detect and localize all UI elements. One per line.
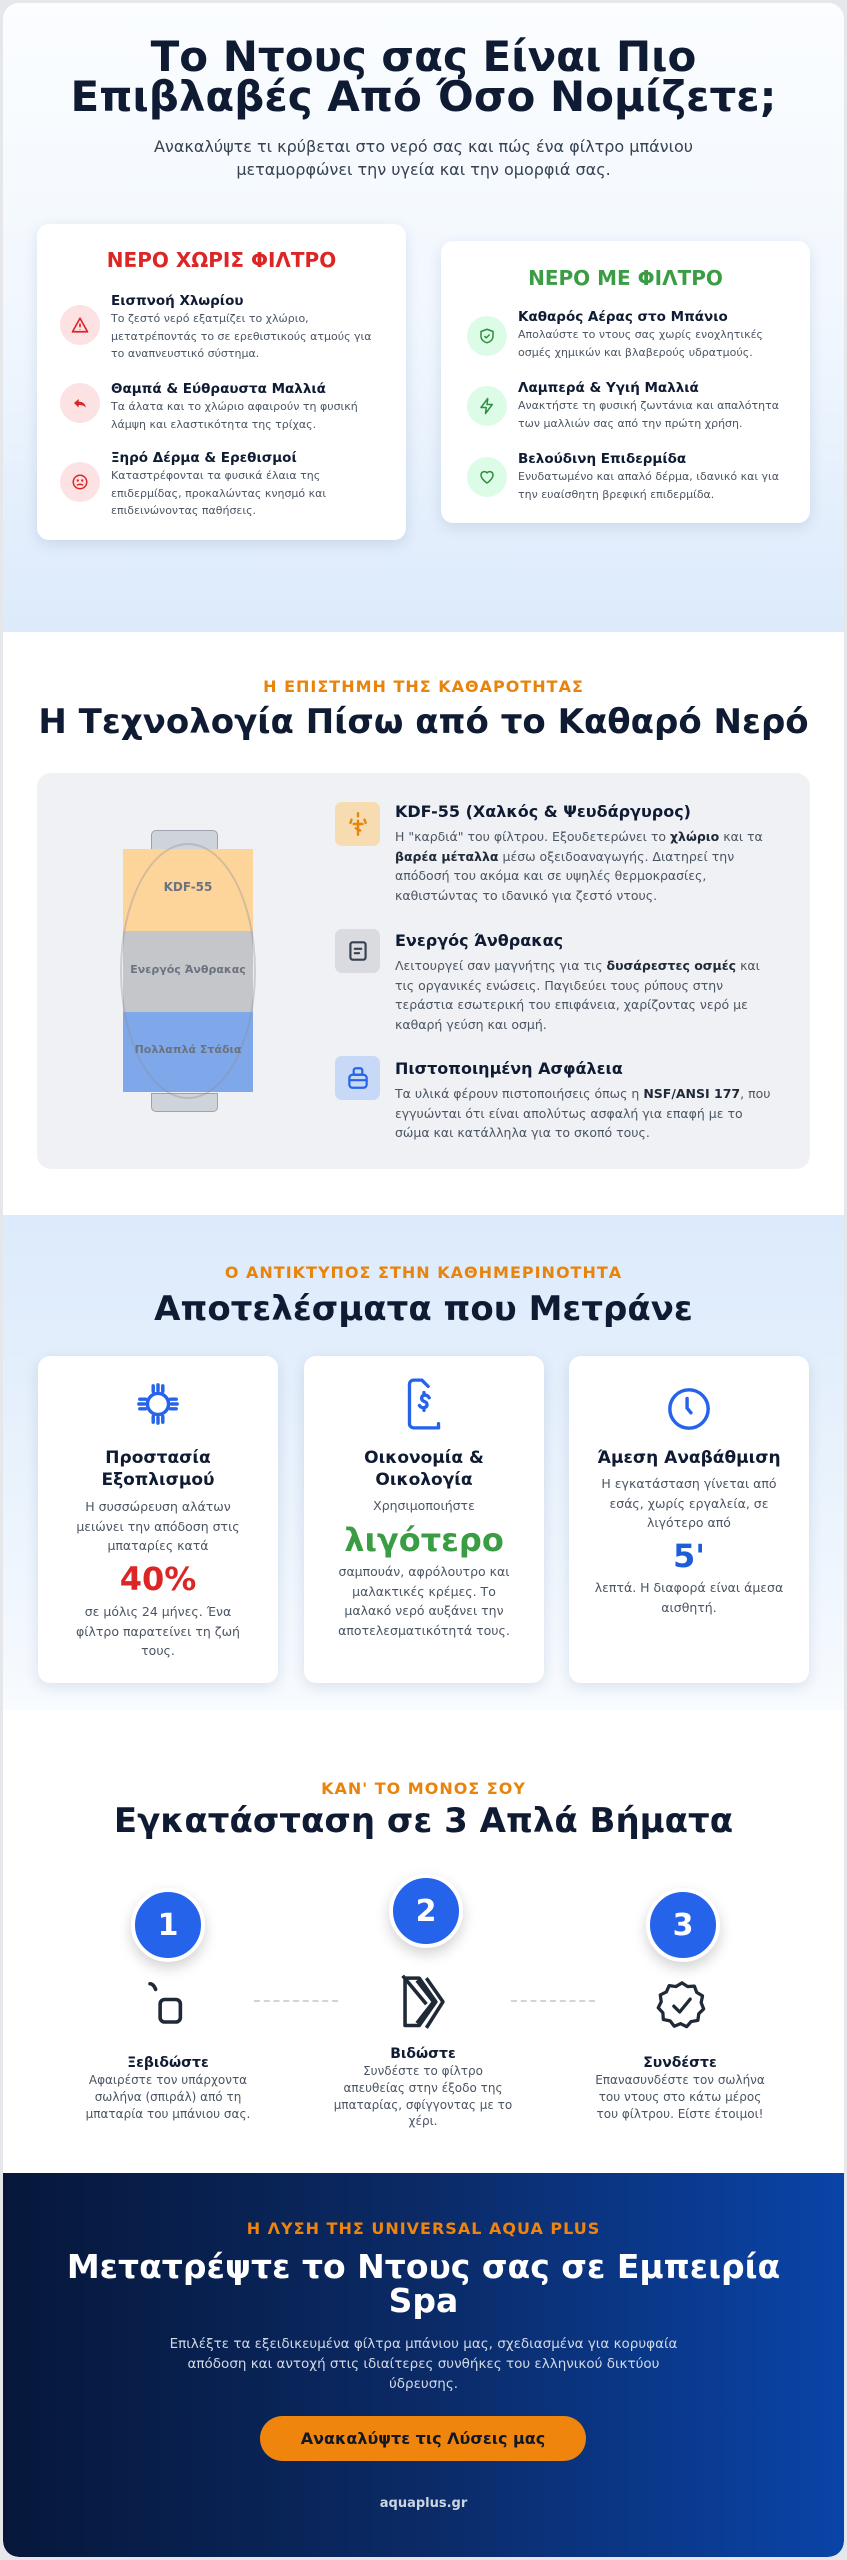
card: equipment protection: Προστασία	[105, 1448, 211, 1468]
item: chlorine: Εισπνοή Χλωρίου	[111, 293, 243, 309]
step 1: μπαταρία του μπάνιου σας.	[86, 2107, 250, 2121]
card: equipment protection: 40%	[120, 1560, 196, 1598]
card: instant upgrade: Άμεση Αναβάθμιση	[597, 1448, 781, 1468]
item: velvet skin: την ευαίσθητη βρεφική επιδερμίδα.	[518, 488, 714, 500]
item: KDF-55: καθιστώντας το ιδανικό για ζεστό ντους.	[395, 888, 657, 902]
card: instant upgrade: εσάς, χωρίς εργαλεία, σε	[610, 1496, 768, 1511]
item: skin: Ξηρό Δέρμα & Ερεθισμοί	[111, 450, 297, 466]
item: KDF-55: KDF-55 (Χαλκός & Ψευδάργυρος)	[395, 802, 691, 821]
item: chlorine: Το ζεστό νερό εξατμίζει το χλώριο,	[111, 312, 309, 325]
filter cartridge diagram: KDF-55	[164, 880, 212, 894]
badge 1: 1	[158, 1908, 178, 1942]
card: equipment protection: φίλτρο παρατείνει τη ζωή	[76, 1624, 240, 1639]
item: clean air	[518, 309, 763, 358]
item: certified safety: Πιστοποιημένη Ασφάλεια	[395, 1059, 623, 1078]
step 2: Βιδώστε	[390, 2046, 456, 2062]
icon: gear sun	[137, 1383, 179, 1425]
heading: with filter: ΝΕΡΟ ΜΕ ΦΙΛΤΡΟ	[528, 266, 723, 290]
section: results	[3, 1215, 844, 1710]
card: equipment protection: Εξοπλισμού	[101, 1470, 215, 1490]
section: technology	[3, 632, 844, 1215]
section: installation steps	[3, 1710, 844, 2173]
item: activated carbon: τις οργανικές ενώσεις. Παγιδεύει τους ρύπους στην	[395, 978, 723, 992]
item: activated carbon: τεράστια εσωτερική του επιφάνεια, χαρίζοντας νερό με	[395, 997, 748, 1012]
card: equipment protection: μπαταρίες κατά	[107, 1538, 209, 1553]
step 1	[86, 1892, 250, 2121]
badge 1	[131, 1888, 205, 1962]
icon: carbon	[335, 929, 380, 973]
filter cartridge diagram	[120, 830, 256, 1112]
icon: hair	[60, 383, 100, 423]
item: certified safety: εγγυώνται ότι είναι απολύτως ασφαλή για επαφή με το	[395, 1106, 743, 1120]
step 2: μπαταρίας, σφίγγοντας με το	[334, 2098, 512, 2112]
card: instant upgrade	[569, 1356, 809, 1683]
icon: bolt	[467, 386, 507, 426]
step 3: του ντους στο κάτω μέρος	[599, 2090, 761, 2104]
heading: without filter: ΝΕΡΟ ΧΩΡΙΣ ΦΙΛΤΡΟ	[107, 248, 336, 272]
icon: shield	[467, 316, 507, 356]
subtitle: Ανακαλύψτε τι κρύβεται στο νερό σας και πώς ένα φίλτρο μπάνιου	[154, 137, 693, 156]
heading: Η Τεχνολογία Πίσω από το Καθαρό Νερό	[38, 702, 809, 742]
icon: safety	[335, 1056, 380, 1100]
text: ύδρευσης.	[389, 2376, 458, 2392]
text	[170, 2336, 677, 2392]
heading: Μετατρέψτε το Ντους σας σε Εμπειρία	[67, 2247, 780, 2286]
text: απόδοση και αντοχή στις ιδιαίτερες συνθήκες του ελληνικού δικτύου	[188, 2356, 659, 2372]
icon: heart	[467, 457, 507, 497]
card: instant upgrade: Η εγκατάσταση γίνεται από	[601, 1476, 777, 1491]
card: economy: μαλακτικές κρέμες. Το	[352, 1584, 496, 1599]
panel: water without filter	[37, 224, 406, 540]
icon: badge check	[656, 1981, 706, 2028]
item: skin	[111, 450, 326, 517]
item: certified safety	[394, 1059, 770, 1140]
item: KDF-55: βαρέα μέταλλα μέσω οξειδοαναγωγής. Διατηρεί την	[395, 848, 734, 864]
item: shiny hair: των μαλλιών σας από την πρώτη χρήση.	[518, 416, 742, 430]
item: activated carbon: Ενεργός Άνθρακας	[395, 931, 563, 950]
item: hair	[110, 381, 358, 430]
item: clean air: οσμές χημικών και βλαβερούς υδρατμούς.	[518, 346, 753, 358]
subtitle	[154, 137, 693, 179]
item: chlorine: το αναπνευστικό σύστημα.	[111, 347, 259, 360]
item: shiny hair	[518, 380, 779, 430]
card: equipment protection: Η συσσώρευση αλάτων	[85, 1499, 231, 1514]
label: Ο ΑΝΤΙΚΤΥΠΟΣ ΣΤΗΝ ΚΑΘΗΜΕΡΙΝΟΤΗΤΑ	[225, 1263, 622, 1282]
panel: technology	[37, 773, 810, 1169]
footer: call to action	[3, 2173, 844, 2557]
item: hair: Τα άλατα και το χλώριο αφαιρούν τη φυσική	[111, 400, 358, 413]
card: economy: αποτελεσματικότητά τους.	[338, 1623, 510, 1638]
step 3	[595, 1892, 765, 2121]
item: chlorine	[110, 293, 372, 360]
item: certified safety: Τα υλικά φέρουν πιστοποιήσεις όπως η NSF/ANSI 177, που	[395, 1086, 770, 1101]
item: velvet skin: Βελούδινη Επιδερμίδα	[518, 451, 686, 467]
badge 2: 2	[416, 1894, 436, 1928]
title	[70, 32, 776, 121]
button	[260, 2416, 586, 2461]
arrow: dashed connector 1	[254, 2000, 338, 2002]
item: KDF-55: Η "καρδιά" του φίλτρου. Εξουδετερώνει το χλώριο και τα	[395, 829, 763, 844]
label: Η ΛΥΣΗ ΤΗΣ UNIVERSAL AQUA PLUS	[247, 2219, 600, 2238]
hero section	[3, 3, 844, 632]
item: skin: επιδερμίδας, προκαλώντας κνησμό και	[111, 486, 326, 500]
item: KDF-55: απόδοσή του ακόμα και σε υψηλές θερμοκρασίες,	[395, 868, 706, 883]
icon: KDF	[335, 802, 380, 846]
step 3: του φίλτρου. Είστε έτοιμοι!	[597, 2107, 763, 2121]
card: instant upgrade: λεπτά. Η διαφορά είναι άμεσα	[595, 1580, 783, 1595]
card: economy: Οικολογία	[375, 1470, 473, 1490]
card: economy: λιγότερο	[344, 1521, 504, 1559]
card: equipment protection: μειώνει την απόδοση στις	[76, 1519, 240, 1534]
step 2	[334, 1878, 512, 2128]
label: Η ΕΠΙΣΤΗΜΗ ΤΗΣ ΚΑΘΑΡΟΤΗΤΑΣ	[263, 677, 584, 696]
item: activated carbon: καθαρή γεύση και οσμή.	[395, 1016, 547, 1032]
item: activated carbon	[395, 931, 760, 1032]
step 2: απευθείας στην έξοδο της	[343, 2081, 503, 2095]
card: equipment protection	[38, 1356, 278, 1683]
card: instant upgrade: 5'	[673, 1537, 705, 1575]
step 1: σωλήνα (σπιράλ) από τη	[95, 2090, 241, 2104]
badge 3	[646, 1888, 720, 1962]
heading: Εγκατάσταση σε 3 Απλά Βήματα	[114, 1801, 733, 1841]
card: equipment protection: σε μόλις 24 μήνες. Ένα	[85, 1604, 231, 1619]
item: hair: Θαμπά & Εύθραυστα Μαλλιά	[111, 381, 326, 397]
item: KDF-55	[395, 802, 763, 902]
icon: clock	[668, 1388, 710, 1430]
step 1: Αφαιρέστε τον υπάρχοντα	[89, 2073, 247, 2087]
icon: sad face	[60, 462, 100, 502]
icon: warning	[60, 305, 100, 345]
arrow: dashed connector 2	[511, 2000, 595, 2002]
title: Επιβλαβές Από Όσο Νομίζετε;	[70, 72, 776, 121]
button: Ανακαλύψτε τις Λύσεις μας	[301, 2429, 545, 2448]
text: Επιλέξτε τα εξειδικευμένα φίλτρα μπάνιου μας, σχεδιασμένα για κορυφαία	[170, 2336, 677, 2352]
section: installation steps: χέρι.	[409, 2114, 437, 2128]
icon: unscrew	[148, 1982, 182, 2024]
step 1: Ξεβιδώστε	[127, 2055, 209, 2071]
item: skin: Καταστρέφονται τα φυσικά έλαια της	[111, 469, 320, 482]
item: skin: επιδεινώνοντας παθήσεις.	[111, 504, 256, 517]
item: velvet skin	[518, 451, 779, 500]
item: hair: λάμψη και ελαστικότητα της τρίχας.	[111, 418, 316, 430]
heading: Spa	[389, 2281, 458, 2320]
icon: screw in	[401, 1974, 445, 2029]
card: instant upgrade: λιγότερο από	[647, 1515, 731, 1530]
item: activated carbon: Λειτουργεί σαν μαγνήτης για τις δυσάρεστες οσμές και	[395, 958, 760, 973]
filter cartridge diagram: Πολλαπλά Στάδια	[135, 1043, 241, 1056]
icon: dollar	[408, 1378, 440, 1430]
item: certified safety: σώμα και κατάλληλα για το σκοπό τους.	[395, 1125, 650, 1140]
heading: Αποτελέσματα που Μετράνε	[154, 1289, 693, 1329]
step 3: Επανασυνδέστε τον σωλήνα	[595, 2073, 765, 2087]
card: instant upgrade: αισθητή.	[661, 1600, 717, 1615]
heading	[67, 2247, 780, 2320]
item: shiny hair: Λαμπερά & Υγιή Μαλλιά	[518, 380, 699, 396]
panel: water with filter	[441, 241, 810, 523]
website: aquaplus.gr	[380, 2496, 467, 2511]
card: economy: Οικονομία &	[364, 1448, 484, 1468]
card: equipment protection: τους.	[141, 1643, 175, 1658]
subtitle: μεταμορφώνει την υγεία και την ομορφιά σας.	[236, 160, 611, 179]
label: ΚΑΝ' ΤΟ ΜΟΝΟΣ ΣΟΥ	[321, 1779, 526, 1798]
item: velvet skin: Ενυδατωμένο και απαλό δέρμα, ιδανικό και για	[518, 470, 779, 483]
item: clean air: Καθαρός Αέρας στο Μπάνιο	[518, 309, 728, 325]
step 2: Συνδέστε το φίλτρο	[363, 2064, 483, 2078]
item: shiny hair: Ανακτήστε τη φυσική ζωντάνια και απαλότητα	[518, 399, 779, 412]
item: clean air: Απολαύστε το ντους σας χωρίς ενοχλητικές	[518, 328, 763, 341]
step 3: Συνδέστε	[643, 2055, 717, 2071]
card: economy: Χρησιμοποιήστε	[373, 1498, 475, 1513]
badge 2	[389, 1874, 463, 1948]
card: economy: σαμπουάν, αφρόλουτρο και	[339, 1564, 509, 1579]
title: Το Ντους σας Είναι Πιο	[151, 32, 696, 81]
card: economy	[304, 1356, 544, 1683]
badge 3: 3	[673, 1908, 693, 1942]
card: economy: μαλακό νερό αυξάνει την	[344, 1603, 504, 1618]
item: chlorine: μετατρέποντάς το σε ερεθιστικούς ατμούς για	[111, 330, 372, 342]
filter cartridge diagram: Ενεργός Άνθρακας	[130, 963, 246, 976]
